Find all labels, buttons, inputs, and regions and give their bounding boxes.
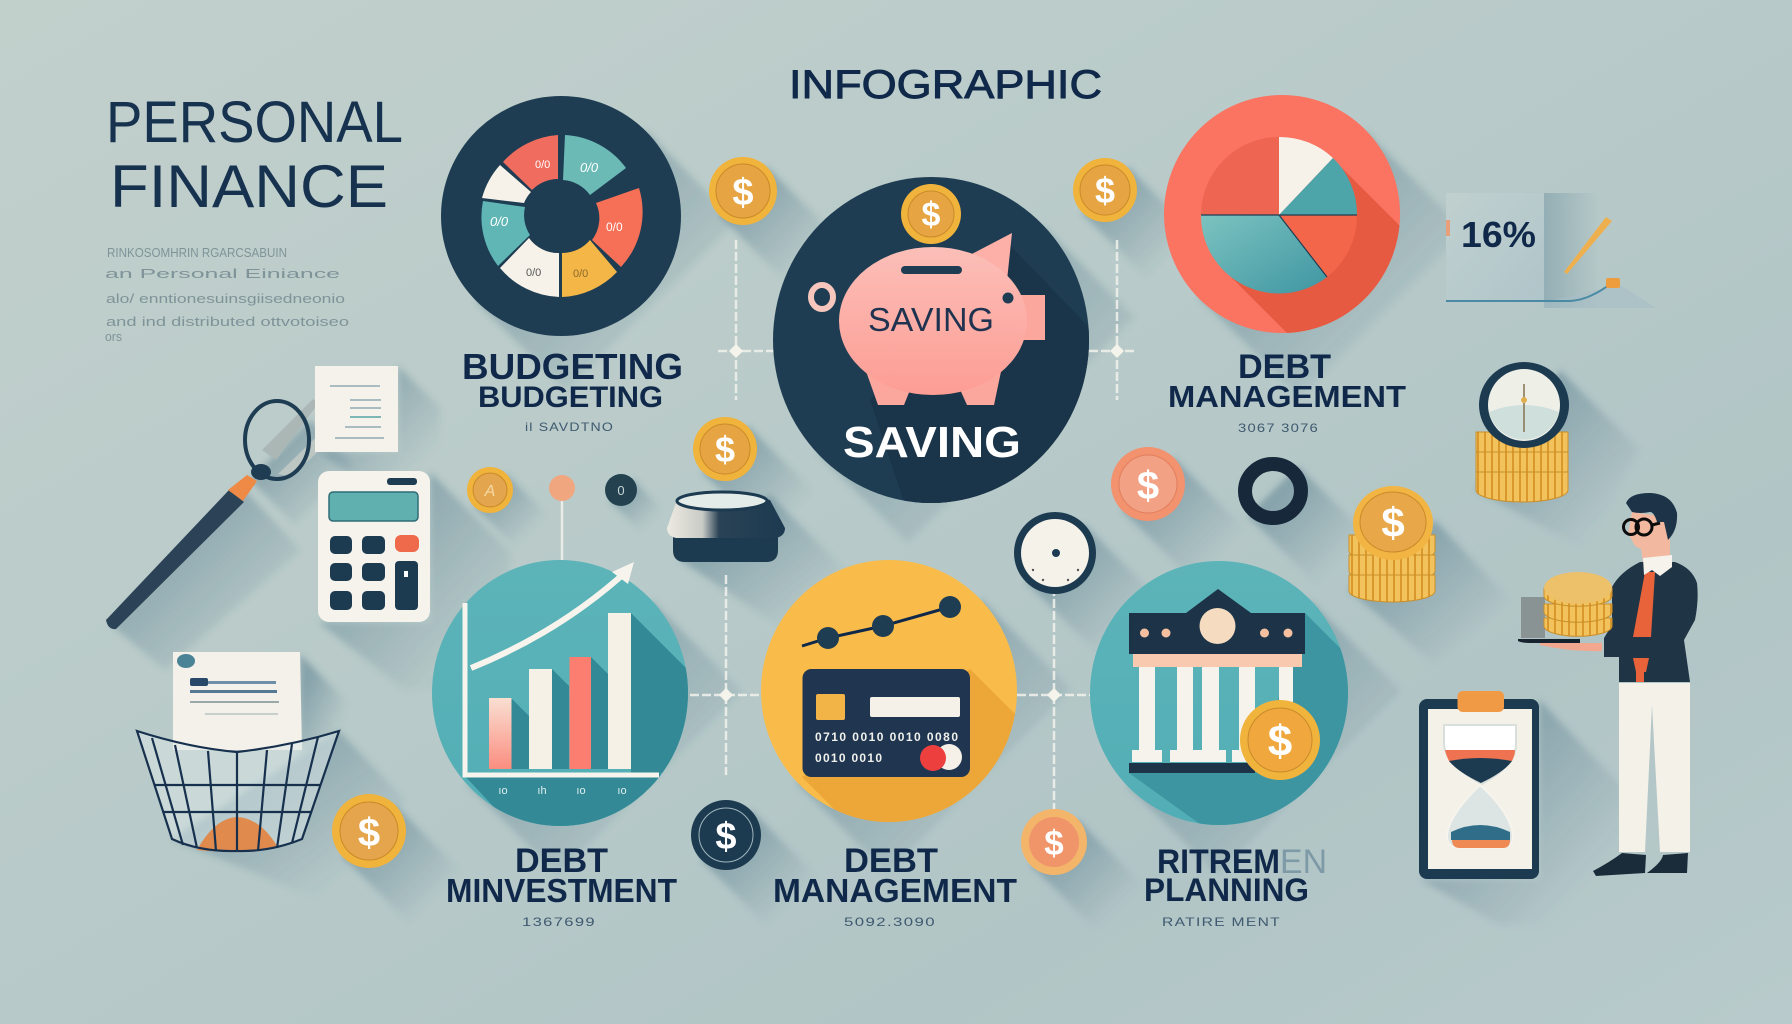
coin: peach: $: [1137, 464, 1159, 508]
piggy bank: [811, 233, 1045, 405]
coin: peach: $: [1044, 824, 1064, 863]
icon: small coin: A: [484, 483, 495, 500]
label: debt management bottom: MANAGEMENT: [773, 872, 1017, 909]
icon: dark coin small: [605, 474, 637, 506]
glasses: [1624, 519, 1660, 535]
line chart: [802, 596, 961, 649]
legs and trousers: [1619, 683, 1690, 852]
label: budgeting: BUDGETING: [462, 346, 683, 387]
coin: [1240, 700, 1320, 780]
yellow circle: [761, 560, 1017, 822]
piggy bank: SAVING: [868, 301, 994, 338]
credit card: [802, 669, 970, 777]
saving label: SAVING: [843, 418, 1021, 467]
label: debt management top: MANAGEMENT: [1168, 379, 1406, 414]
intro text block: [105, 245, 349, 344]
chart: 16 percent: [1446, 193, 1656, 308]
donut chart: 0/0: [580, 160, 599, 175]
icon: bowl: [667, 492, 785, 562]
icon: hourglass tablet: [1419, 691, 1539, 879]
label: retirement planning: [1144, 843, 1327, 929]
bar chart: ıh: [537, 785, 547, 797]
donut chart: 0/0: [606, 220, 623, 234]
cup behind coins: [1521, 597, 1545, 638]
credit card: 0010 0010: [815, 751, 882, 765]
tie: [1633, 572, 1655, 682]
collar: [1643, 555, 1672, 576]
label: debt management bottom: DEBT: [844, 842, 938, 880]
donut chart: 0/0: [526, 267, 541, 279]
label: debt management bottom: [773, 842, 1017, 929]
coin: [693, 417, 757, 481]
coin: $: [922, 196, 941, 234]
label: budgeting: [462, 346, 683, 434]
intro text block: ors: [105, 329, 122, 344]
donut chart: [481, 135, 643, 297]
icon: dark coin small: 0: [617, 483, 625, 498]
donut chart: 0/0: [573, 268, 588, 280]
label: budgeting: BUDGETING: [478, 381, 663, 414]
label: retirement planning: PLANNING: [1144, 872, 1309, 908]
saving circle: [773, 177, 1089, 503]
coin: dark: $: [715, 816, 737, 858]
coin: $: [715, 429, 735, 470]
panel: saving: [773, 177, 1089, 503]
torso: [1604, 562, 1698, 682]
icon: magnifier: [106, 399, 337, 629]
icon: basket: [137, 731, 339, 851]
icon: peach dot: [549, 475, 575, 501]
chart: 16 percent: 16%: [1461, 214, 1536, 255]
bar chart: ıo: [498, 785, 508, 797]
hair: [1626, 493, 1677, 540]
title: Personal Finance: FINANCE: [110, 153, 388, 220]
label: debt management top: 3067 3076: [1238, 421, 1319, 435]
budgeting circle: [441, 96, 681, 336]
icon: small coin: [467, 467, 513, 513]
icon: ring: [1245, 464, 1301, 518]
icon: clock on coin stack: [1476, 362, 1569, 502]
intro text block: an Personal Einiance: [105, 266, 340, 281]
label: retirement planning: RATIRE MENT: [1162, 915, 1281, 929]
panel: budgeting: [441, 96, 681, 336]
intro text block: RINKOSOMHRIN RGARCSABUIN: [107, 245, 287, 260]
coin: $: [1095, 170, 1115, 211]
icon: coin stack: $: [1381, 499, 1405, 546]
title: Personal Finance: [106, 90, 403, 220]
label: debt management bottom: 5092.3090: [844, 915, 936, 929]
icon: document: [315, 366, 398, 452]
coral circle: [1164, 95, 1400, 333]
coin stack held: [1544, 572, 1612, 636]
donut chart: 0/0: [490, 214, 509, 229]
intro text block: alo/ enntionesuinsgiisedneonio: [106, 291, 345, 306]
coin: peach: [1021, 809, 1087, 875]
label: retirement planning: EN: [1280, 843, 1327, 881]
neck and face: [1628, 512, 1670, 562]
credit card: 0710 0010 0010 0080: [815, 730, 958, 744]
label: debt management top: [1168, 348, 1406, 435]
icon: clock: [1014, 512, 1096, 594]
panel: debt management bottom: [761, 560, 1017, 822]
label: debt management top: DEBT: [1238, 348, 1331, 386]
label: investment: 1367699: [522, 915, 596, 929]
tray: [1518, 639, 1580, 643]
panel: debt management top: [1164, 95, 1400, 333]
bar chart: ıo: [617, 785, 627, 797]
coin: peach: [1111, 447, 1185, 521]
panel: investment: [432, 560, 688, 826]
coin: $: [1268, 717, 1292, 766]
label: budgeting: il SAVDTNO: [525, 420, 614, 434]
hourglass: [1444, 725, 1516, 848]
coin: $: [732, 172, 754, 214]
coin: $: [358, 811, 380, 855]
shoes: [1593, 853, 1688, 876]
bar chart: [465, 562, 659, 797]
icon: paper: [173, 652, 302, 750]
coin: [332, 794, 406, 868]
coin: [901, 184, 961, 244]
illustration: man holding coins: [1518, 493, 1698, 876]
teal circle: [432, 560, 688, 826]
bar chart: ıo: [576, 785, 586, 797]
heading: Infographic: INFOGRAPHIC: [789, 63, 1102, 107]
intro text block: and ind distributed ottvotoiseo: [106, 314, 349, 329]
teal circle: [1090, 561, 1348, 825]
coin: dark: [691, 800, 761, 870]
label: investment: DEBT: [515, 842, 608, 880]
title: Personal Finance: PERSONAL: [106, 90, 403, 155]
bank building: [1129, 589, 1305, 773]
icon: calculator: [318, 471, 430, 622]
label: investment: MINVESTMENT: [446, 872, 677, 909]
hand: [1540, 643, 1602, 651]
coin: [1073, 158, 1137, 222]
label: investment: [446, 842, 677, 929]
panel: retirement: [1090, 561, 1348, 825]
coin: [709, 157, 777, 225]
label: retirement planning: RITREM: [1157, 843, 1280, 881]
pie chart: [1201, 137, 1357, 294]
icon: coin stack: [1349, 486, 1435, 602]
donut chart: 0/0: [535, 159, 550, 171]
